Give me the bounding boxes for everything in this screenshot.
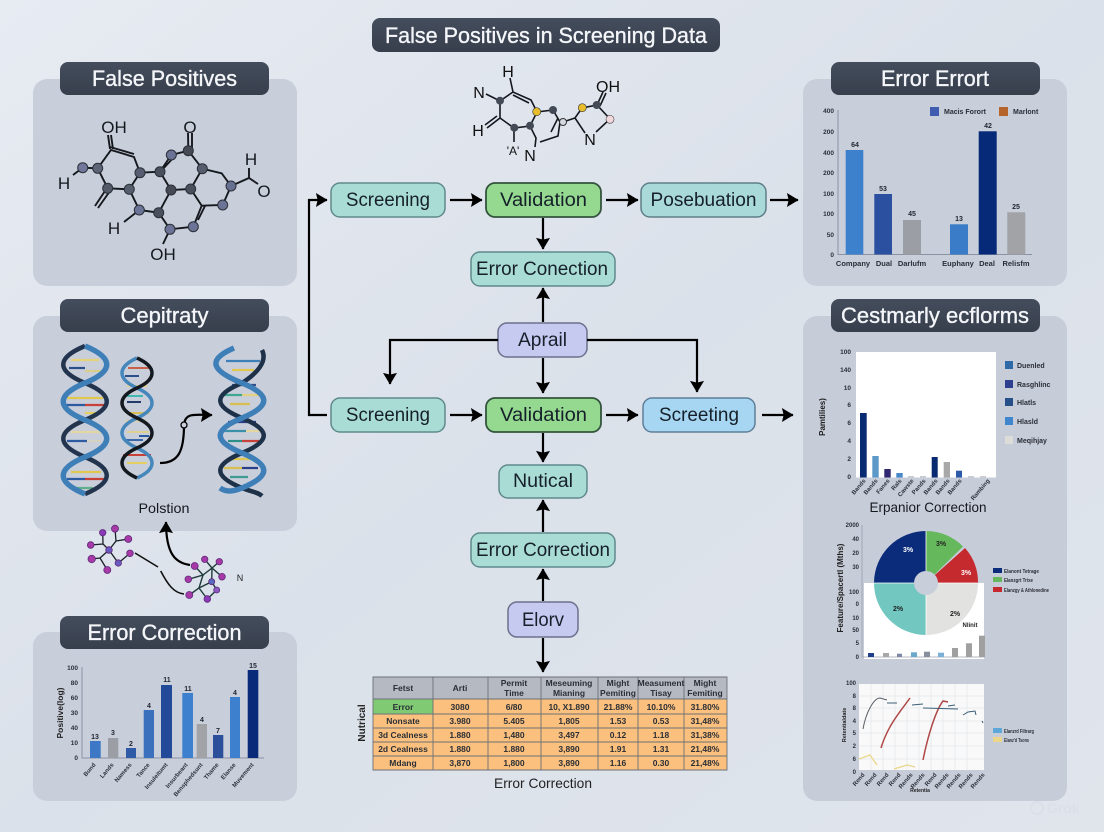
- chart legend: [993, 728, 1034, 744]
- line chart: 100: [846, 681, 857, 687]
- icon: molecule: O: [257, 182, 271, 201]
- bar chart: error correction: Elanse: [220, 762, 238, 781]
- flow node: nutical: Nutical: [513, 471, 573, 492]
- pie chart with small bars: Nlinit: [962, 623, 978, 629]
- bar chart: error correction: 4: [200, 717, 204, 724]
- flow node: aprail: Aprail: [518, 330, 567, 351]
- bar chart: expansion correction: Bands: [947, 478, 964, 496]
- bar chart: error errort: 200: [823, 170, 834, 177]
- bar chart: error correction: 10: [71, 740, 78, 747]
- chart legend: Elanzgy & Athlonedine: [1004, 588, 1049, 594]
- bar chart: error correction: Insuleitumt: [144, 762, 170, 791]
- table: error metrics: 0.30: [653, 758, 670, 768]
- table: error metrics: 3080: [451, 702, 470, 712]
- arrow: elorv to error correction: [542, 569, 544, 601]
- heading: cestmarly ecflorms: Cestmarly ecflorms: [841, 303, 1029, 328]
- bar chart: expansion correction: 140: [840, 367, 851, 374]
- table: error metrics: 31,48%: [691, 716, 720, 726]
- icon: dna helix left: [63, 346, 107, 494]
- table: error metrics: 1.880: [449, 730, 471, 740]
- pie chart with small bars: [836, 523, 1049, 661]
- table: error metrics: 1.880: [449, 744, 471, 754]
- line chart: Retentia: [910, 788, 930, 794]
- line chart: 8: [853, 706, 857, 712]
- heading: error correction: Error Correction: [88, 620, 242, 645]
- panel: error errort: [803, 62, 1067, 286]
- watermark: grok: Grok: [1047, 800, 1080, 816]
- icon: central molecule: N: [473, 85, 485, 102]
- bar chart: error correction: 2: [129, 741, 133, 748]
- arrow: validation to nutical: [542, 433, 544, 462]
- bar chart: expansion correction: Rals: [891, 478, 904, 492]
- bar chart: error errort: 100: [823, 211, 834, 218]
- bar chart: error errort: 100: [823, 191, 834, 198]
- bar chart: error correction: 4: [233, 690, 237, 697]
- bar chart: expansion correction: 2: [847, 456, 851, 463]
- icon: purple molecule left: [87, 525, 133, 574]
- flow node: screening bottom: [331, 398, 445, 432]
- table: error metrics: 3,890: [558, 758, 580, 768]
- table: error metrics: 31,38%: [691, 730, 720, 740]
- icon: central molecule: N: [524, 148, 536, 165]
- arrow: aprail left branch: [390, 340, 498, 384]
- bar chart: expansion correction: Fanes: [876, 478, 892, 496]
- table: error metrics: 1,480: [503, 730, 525, 740]
- label: polstion: Polstion: [138, 500, 190, 516]
- table: error metrics: Femiting: [687, 688, 723, 698]
- bar chart: error errort: 45: [908, 211, 916, 218]
- chart legend: Hlatls: [1017, 400, 1036, 407]
- bar chart: error correction: 40: [71, 725, 78, 732]
- heading: false positives: [60, 62, 269, 95]
- bar chart: expansion correction: 10: [844, 385, 851, 392]
- arrow: posebuation to chart: [770, 199, 798, 201]
- line chart: Rends: [946, 772, 963, 790]
- flow node: screening top: Screening: [346, 190, 430, 211]
- heading: error errort: Error Errort: [881, 66, 989, 91]
- table: error metrics: 0.12: [610, 730, 627, 740]
- bar chart: expansion correction: 6: [847, 402, 851, 409]
- chart legend: Elanont Tetrage: [1004, 569, 1039, 575]
- chart legend: [930, 107, 1039, 116]
- heading: error correction: [60, 616, 269, 649]
- bar chart: error errort: 200: [823, 129, 834, 136]
- bar chart: error errort: [823, 107, 1039, 268]
- icon: molecule: H: [58, 174, 70, 193]
- icon: central molecule: [472, 64, 620, 165]
- flow node: aprail: [498, 323, 587, 357]
- arrow: error correction to nutical: [542, 500, 544, 532]
- icon: molecule: OH: [150, 245, 176, 264]
- bar chart: expansion correction: Pands: [911, 478, 928, 496]
- icon: molecule: H: [108, 219, 120, 238]
- chart legend: Rasghlinc: [1017, 382, 1051, 389]
- pie chart with small bars: 0: [856, 655, 860, 661]
- bar chart: error correction: 0: [74, 755, 78, 762]
- table: error metrics: 1.880: [503, 744, 525, 754]
- icon: purple molecule right: N: [237, 573, 243, 583]
- bar chart: expansion correction: [818, 349, 1051, 502]
- icon: molecule: O: [183, 118, 197, 137]
- table: error metrics: 0.53: [653, 716, 670, 726]
- line chart: Rend: [852, 772, 867, 788]
- bar chart: error errort: Deal: [979, 259, 995, 268]
- bar chart: expansion correction: 4: [847, 438, 851, 445]
- line chart: Rends: [970, 772, 987, 790]
- pie chart with small bars: 2%: [893, 606, 904, 613]
- flow node: validation bottom: Validation: [500, 405, 587, 426]
- table: error metrics: 21,48%: [691, 744, 720, 754]
- bar chart: error errort: 0: [830, 252, 834, 259]
- line chart: Retentialdate: [842, 708, 848, 742]
- icon: molecule: [58, 118, 271, 264]
- bar chart: error errort: 25: [1012, 204, 1020, 211]
- table: error metrics: 1.53: [610, 716, 627, 726]
- table: error metrics: 1.16: [610, 758, 627, 768]
- line chart: 0: [853, 770, 857, 776]
- bar chart: error errort: Darlufm: [898, 259, 926, 268]
- arrow: validation to posebuation: [606, 199, 638, 201]
- bar chart: error correction: 60: [71, 695, 78, 702]
- bar chart: error correction: 11: [184, 686, 192, 693]
- bar chart: expansion correction: 6: [847, 420, 851, 427]
- chart legend: Meqihjay: [1017, 438, 1047, 445]
- bar chart: error errort: Dual: [876, 259, 892, 268]
- panel: error correction: [33, 616, 297, 801]
- bar chart: error errort: 53: [879, 186, 887, 193]
- table: error metrics: 3,870: [449, 758, 471, 768]
- line chart: [842, 681, 1034, 794]
- table: error metrics: [373, 677, 727, 770]
- table: error metrics: 2d Cealness: [378, 744, 428, 754]
- arrow: elorv to table: [542, 638, 544, 672]
- flow node: error correction: Error Correction: [476, 540, 610, 561]
- pie chart with small bars: 30: [852, 565, 860, 571]
- flow node: validation bottom: [486, 398, 601, 432]
- title: [372, 18, 720, 52]
- line chart: Rend: [864, 772, 879, 788]
- bar chart: error errort: Euphany: [942, 259, 975, 268]
- table: error metrics: 3d Cealness: [378, 730, 428, 740]
- table: error metrics: Meseuming: [546, 678, 592, 688]
- arrow: validation to screeting: [606, 414, 638, 416]
- chart legend: Macis Forort: [944, 109, 987, 116]
- chart legend: Hlasld: [1017, 419, 1038, 426]
- watermark: grok: [1031, 800, 1080, 816]
- table: error metrics: 21.88%: [604, 702, 633, 712]
- pie chart with small bars: 2000: [846, 523, 860, 529]
- table side label: Nutrical: [357, 704, 368, 742]
- bar chart: error correction: 100: [67, 665, 78, 672]
- pie chart with small bars: 50: [852, 628, 860, 634]
- table: error metrics: 1,800: [503, 758, 525, 768]
- flow node: error correction: [471, 533, 615, 567]
- icon: molecule: OH: [101, 118, 127, 137]
- table: error metrics: Fetst: [393, 683, 413, 693]
- flow node: elorv: Elorv: [522, 610, 564, 631]
- bar chart: expansion correction: Bands: [863, 478, 880, 496]
- bar chart: error correction: Lands: [100, 762, 116, 780]
- panel: cestmarly ecflorms: [803, 299, 1067, 801]
- heading: false positives: False Positives: [92, 66, 237, 91]
- table: error metrics: Mdang: [389, 758, 417, 768]
- flow node: screeting: [643, 398, 755, 432]
- line chart: Rend: [888, 772, 903, 788]
- bar chart: expansion correction: Bands: [935, 478, 952, 496]
- bar chart: error errort: 42: [984, 123, 992, 130]
- bar chart: error correction: 30: [71, 710, 78, 717]
- flow node: validation top: Validation: [500, 190, 587, 211]
- flow node: elorv: [508, 602, 578, 637]
- connector: purple molecules: [135, 553, 184, 594]
- table: error metrics: 5.405: [503, 716, 525, 726]
- chart caption: Erpanior Correction: [870, 499, 986, 515]
- flow node: error conection: [471, 252, 615, 286]
- table: error metrics: 3,890: [558, 744, 580, 754]
- arrow: aprail to error conection: [542, 288, 544, 322]
- table: error metrics: Error: [393, 702, 414, 712]
- bar chart: error correction: 7: [216, 728, 220, 735]
- heading: cepitraty: Cepitraty: [120, 303, 208, 328]
- table: error metrics: Measument: [638, 678, 685, 688]
- line chart: Rends: [958, 772, 975, 790]
- table: error metrics: 21,48%: [691, 758, 720, 768]
- arrow: aprail right branch: [587, 340, 697, 392]
- flow node: error conection: Error Conection: [476, 259, 608, 280]
- icon: central molecule: H: [472, 123, 484, 140]
- bar chart: error correction: 80: [71, 680, 78, 687]
- heading: error errort: [831, 62, 1040, 95]
- bar chart: error errort: 400: [823, 108, 834, 115]
- bar chart: expansion correction: Cawste: [897, 478, 916, 498]
- bar chart: error correction: Thame: [204, 762, 221, 781]
- bar chart: error correction: 15: [249, 663, 257, 670]
- table: error metrics: Might: [694, 678, 716, 688]
- flow node: screening top: [331, 183, 445, 217]
- bar chart: error correction: Tance: [136, 762, 152, 779]
- bar chart: error correction: 11: [163, 677, 171, 684]
- pie chart with small bars: 3%: [936, 541, 947, 548]
- icon: central molecule: N: [584, 132, 596, 149]
- line chart: 8: [853, 694, 857, 700]
- bar chart: expansion correction: Bands: [923, 478, 940, 496]
- arrow: bracket linking flow rows: [309, 200, 327, 415]
- arrow: screening to validation lower: [450, 414, 482, 416]
- bar chart: error errort: 64: [851, 142, 859, 149]
- arrow: screening to validation: [450, 199, 482, 201]
- bar chart: error correction: 3: [111, 730, 115, 737]
- line chart: 6: [853, 757, 857, 763]
- flow node: screeting: Screeting: [659, 405, 739, 426]
- table: error metrics: 10, X1.890: [548, 702, 590, 712]
- bar chart: error correction: 13: [91, 734, 99, 741]
- heading: cepitraty: [60, 299, 269, 332]
- flow node: posebuation: Posebuation: [650, 190, 756, 211]
- icon: dna helix right: [216, 348, 264, 496]
- bar chart: error correction: Insurbeant: [165, 762, 190, 790]
- line chart: Rends: [898, 772, 915, 790]
- line chart: 2: [853, 744, 857, 750]
- bar chart: error correction: [55, 663, 264, 798]
- icon: central molecule: 'A': [507, 144, 519, 158]
- line chart: Rend: [924, 772, 939, 788]
- table: error metrics: 1.91: [610, 744, 627, 754]
- panel: cepitraty: [33, 299, 297, 531]
- bar chart: expansion correction: Bands: [851, 478, 868, 496]
- table: error metrics: 1.18: [653, 730, 670, 740]
- bar chart: expansion correction: Pamtilies): [818, 398, 827, 436]
- line chart: Rends: [910, 772, 927, 790]
- bar chart: expansion correction: 0: [847, 474, 851, 481]
- bar chart: error errort: Relisfm: [1002, 259, 1030, 268]
- table caption: Error Correction: [494, 775, 592, 791]
- arrow: screeting to chart: [762, 414, 793, 416]
- icon: central molecule: H: [502, 64, 514, 81]
- pie chart with small bars: 5: [856, 641, 860, 647]
- arrow: validation to error conection: [542, 218, 544, 249]
- pie chart with small bars: 10: [852, 616, 860, 622]
- bar chart: expansion correction: 100: [840, 349, 851, 356]
- bar chart: error correction: Namess: [114, 762, 134, 784]
- table: error metrics: Tisay: [650, 688, 672, 698]
- table: error metrics: Nonsate: [386, 716, 420, 726]
- pie chart with small bars: 3%: [903, 547, 914, 554]
- chart legend: Elanzgrt Trixe: [1004, 578, 1033, 584]
- flow node: nutical: [499, 465, 587, 498]
- bar chart: error correction: Bund: [83, 762, 98, 778]
- bar chart: error correction: Muvement: [232, 762, 256, 789]
- line chart: Rends: [934, 772, 951, 790]
- pie chart with small bars: 20: [852, 551, 860, 557]
- pie chart with small bars: 0: [856, 602, 860, 608]
- table: error metrics: Permit: [501, 678, 527, 688]
- bar chart: error errort: 400: [823, 150, 834, 157]
- pie chart with small bars: 100: [849, 590, 860, 596]
- table: error metrics: 10.10%: [647, 702, 676, 712]
- bar chart: error correction: Bensphedsunt: [173, 762, 205, 798]
- heading: cestmarly ecflorms: [831, 299, 1040, 332]
- table: error metrics: 3,497: [558, 730, 580, 740]
- icon: molecule: H: [245, 150, 257, 169]
- arrow: dna transformation: [160, 415, 212, 463]
- arrow: molecule to polstion: [166, 522, 190, 565]
- bar chart: error errort: Company: [836, 259, 871, 268]
- flow node: validation top: [486, 183, 601, 217]
- icon: central molecule: OH: [596, 79, 620, 96]
- line chart: Rend: [876, 772, 891, 788]
- table: error metrics: 31.80%: [691, 702, 720, 712]
- chart legend: Elanzrd Filtrarg: [1004, 729, 1034, 735]
- chart legend: Elanz'd Tsons: [1004, 738, 1029, 744]
- line chart: 5: [853, 731, 857, 737]
- arrow: aprail to validation: [542, 358, 544, 393]
- table: error metrics: 3.980: [449, 716, 471, 726]
- table: error metrics: Mianing: [553, 688, 585, 698]
- chart legend: Duenled: [1017, 363, 1045, 370]
- chart legend: Marlont: [1013, 109, 1039, 116]
- table: error metrics: Might: [607, 678, 629, 688]
- table: error metrics: 1,805: [558, 716, 580, 726]
- pie chart with small bars: 3%: [961, 570, 972, 577]
- panel: false positives: [33, 62, 297, 286]
- pie chart with small bars: Feature/Spacertl (Mths): [836, 543, 845, 632]
- pie chart with small bars: 40: [852, 537, 860, 543]
- line chart: 4: [853, 719, 857, 725]
- icon: purple molecule right: [185, 556, 243, 602]
- pie chart with small bars: 2%: [950, 611, 961, 618]
- chart legend: [993, 568, 1049, 594]
- title: False Positives in Screening Data: [385, 23, 708, 48]
- table: error metrics: 1.31: [653, 744, 670, 754]
- table: error metrics: Arti: [453, 683, 467, 693]
- table: error metrics: Time: [504, 688, 524, 698]
- chart legend: [1005, 361, 1051, 445]
- flow node: screening bottom: Screening: [346, 405, 430, 426]
- bar chart: error correction: Positive(log): [55, 687, 65, 739]
- bar chart: error correction: 4: [147, 703, 151, 710]
- table: error metrics: Pemiting: [600, 688, 636, 698]
- table: error metrics: 6/80: [506, 702, 523, 712]
- icon: dna helix middle: [122, 358, 152, 478]
- bar chart: expansion correction: Rambing: [970, 478, 992, 502]
- bar chart: error errort: 13: [955, 216, 963, 223]
- flow node: posebuation: [641, 183, 766, 217]
- bar chart: error errort: 50: [827, 232, 834, 239]
